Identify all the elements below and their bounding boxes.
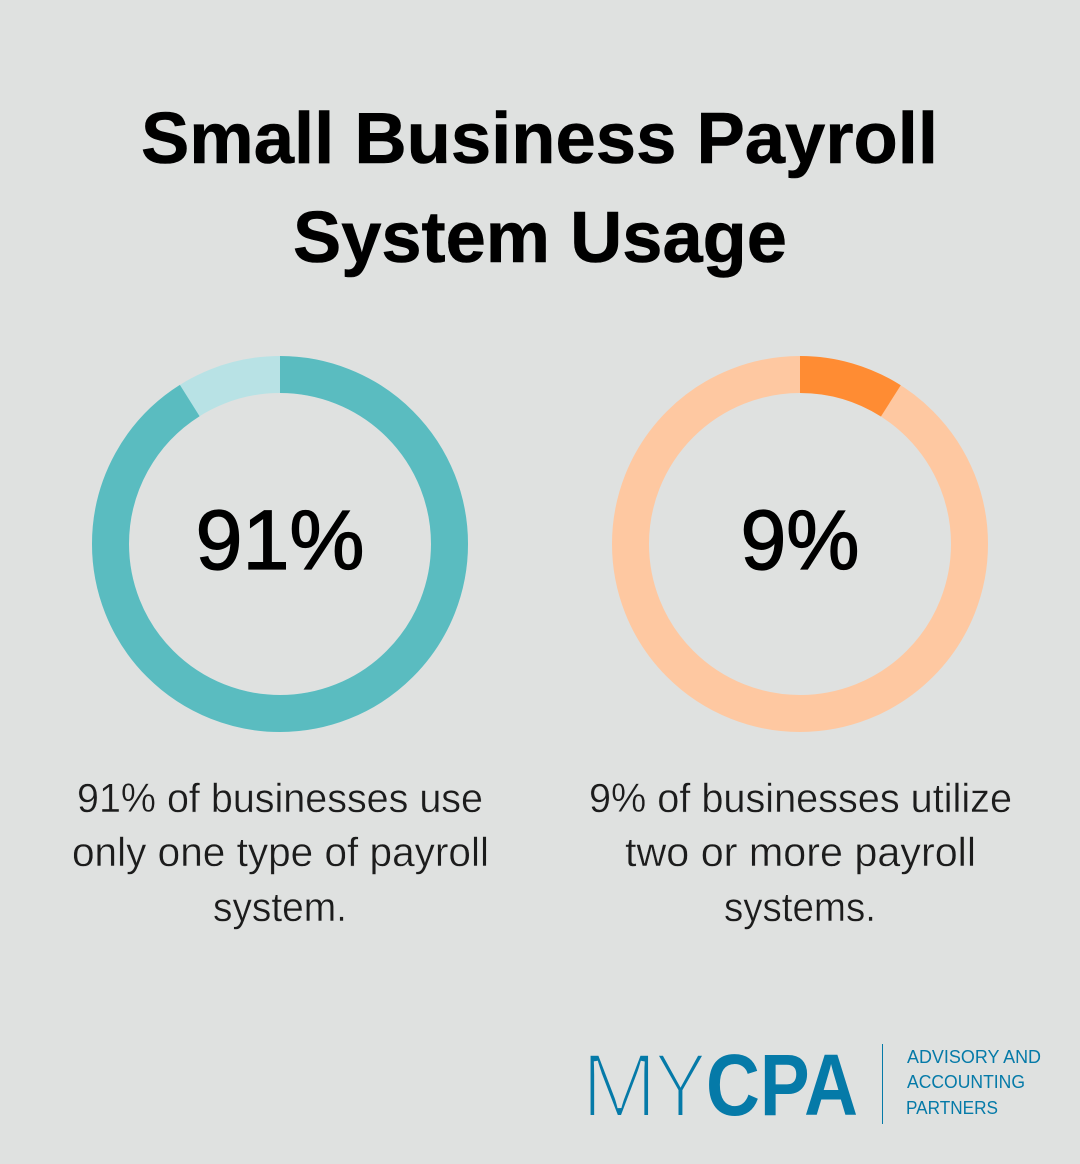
donut chart: 91 percent [110, 374, 450, 714]
description: 91 percent: 91% of businesses use [77, 775, 483, 821]
title: System Usage [293, 198, 787, 278]
description: 9 percent: two or more payroll [625, 829, 976, 875]
stat: 91%: 91% [196, 493, 364, 587]
description: 9 percent: systems. [724, 884, 876, 930]
logo wordmark MY: Y [654, 1035, 707, 1137]
description: 91 percent [72, 775, 489, 930]
logo tagline: ADVISORY AND [907, 1047, 1041, 1067]
logo tagline: PARTNERS [906, 1098, 998, 1118]
title: Small Business Payroll [141, 99, 938, 179]
logo wordmark CPA: CPA [706, 1037, 858, 1134]
panel: 9 percent multiple payroll systems [589, 374, 1012, 930]
description: 9 percent [589, 775, 1012, 930]
title [141, 99, 938, 278]
stat: 9%: 9% [740, 493, 860, 587]
description: 9 percent: 9% of businesses utilize [589, 775, 1012, 821]
description: 91 percent: only one type of payroll [72, 829, 489, 875]
donut chart: 9 percent [630, 374, 970, 714]
logo: MYCPA [581, 1035, 1041, 1137]
logo tagline: ACCOUNTING [907, 1072, 1025, 1092]
description: 91 percent: system. [213, 884, 347, 930]
logo tagline [906, 1047, 1041, 1118]
panel: 91 percent single payroll system [72, 374, 489, 930]
logo wordmark MY: M [581, 1035, 658, 1137]
